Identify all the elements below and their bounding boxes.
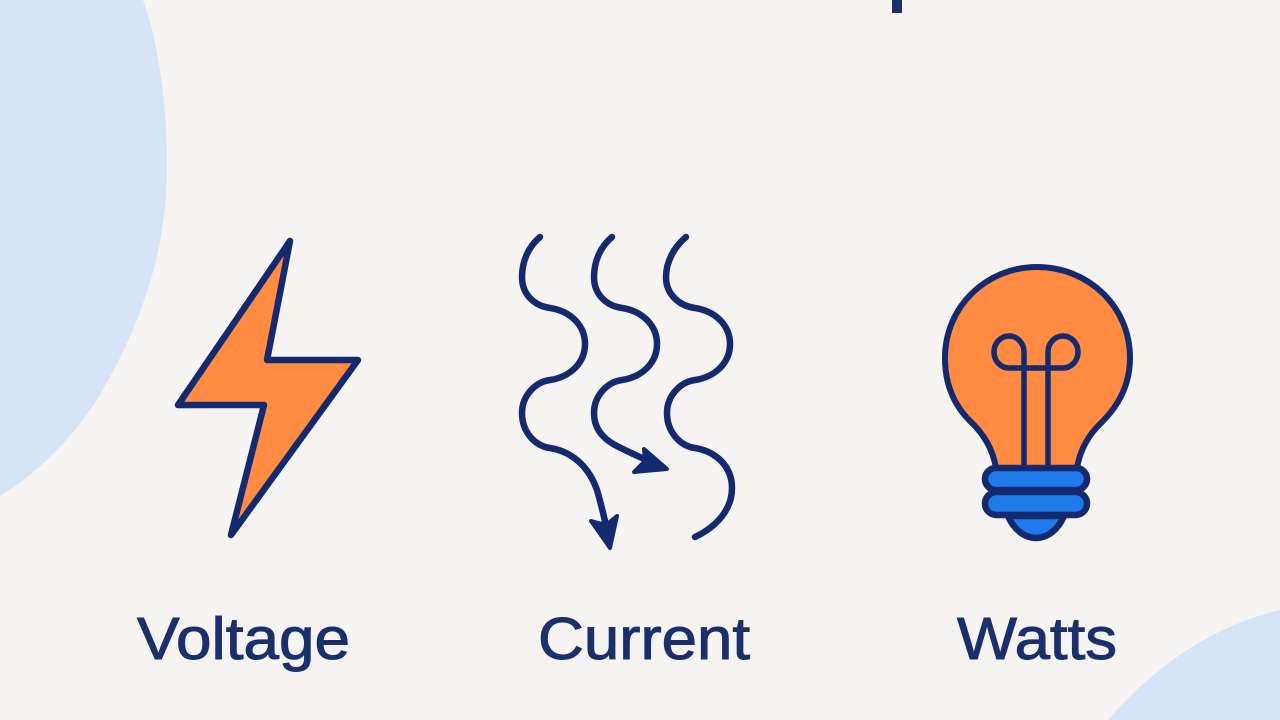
cropped title letter stem <box>892 0 902 13</box>
wave 2 with right arrow <box>594 237 667 472</box>
icon: voltage lightning bolt <box>178 241 358 535</box>
label: Watts: Watts <box>957 606 1117 672</box>
icon: current wavy arrows <box>522 237 732 548</box>
bulb glass <box>945 267 1130 468</box>
filament <box>994 336 1078 467</box>
icon: watts light bulb <box>945 267 1130 538</box>
label: Current: Current <box>538 606 750 672</box>
bulb base <box>985 468 1087 538</box>
decorative blob: left <box>0 0 167 496</box>
wave 1 with downward arrow <box>522 237 617 548</box>
decorative blob: bottom right <box>1108 610 1280 720</box>
wave 3 <box>666 237 732 537</box>
label: Voltage: Voltage <box>137 606 350 672</box>
